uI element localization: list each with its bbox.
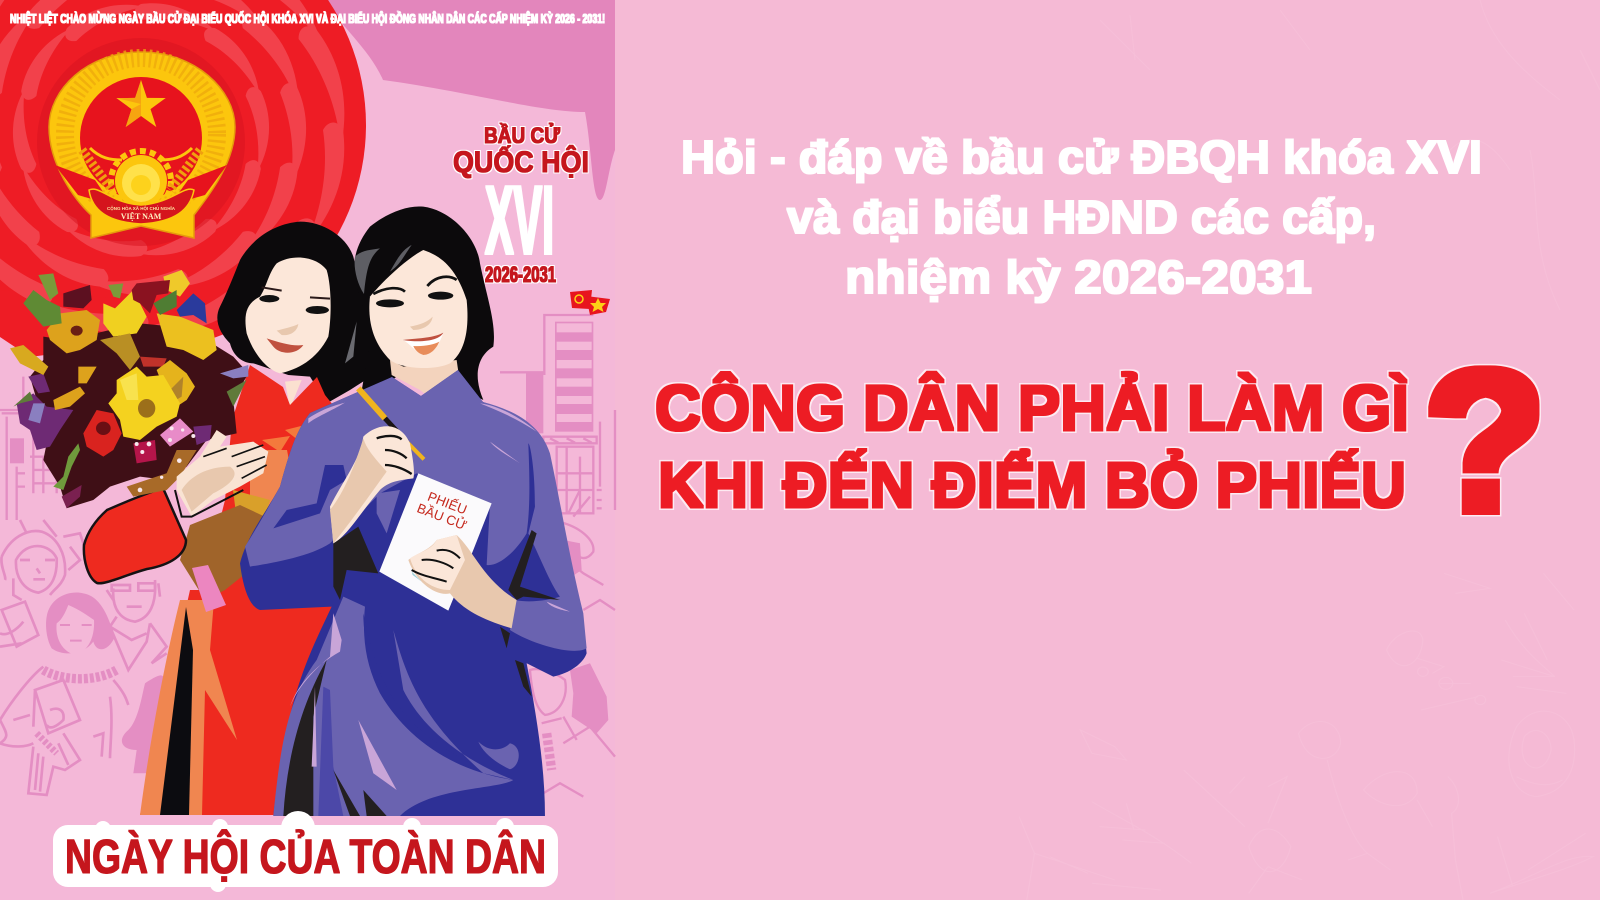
intro heading: hỏi đáp bbox=[681, 131, 1482, 303]
book top bbox=[0, 602, 38, 647]
background buildings, right bbox=[500, 315, 615, 797]
crowd line drawings, left bbox=[0, 520, 167, 795]
emblem ribbon: VIỆT NAM bbox=[121, 212, 162, 221]
right hand holding ballot bbox=[408, 535, 517, 628]
purple dress lower light areas bbox=[273, 597, 513, 816]
purple dress upper light areas bbox=[245, 370, 587, 651]
intro heading: hỏi đáp: nhiệm kỳ 2026-2031 bbox=[845, 251, 1312, 303]
ballot paper: PHIẾU bbox=[426, 489, 469, 517]
poster election title: BẦU CỬ bbox=[484, 123, 561, 148]
purple dress silhouette bbox=[240, 370, 587, 816]
main question heading bbox=[655, 371, 1409, 521]
banner: ngày hội của toàn dân bbox=[53, 811, 558, 892]
left hand holding pen bbox=[330, 426, 414, 543]
left woman hand on chest bbox=[175, 430, 268, 517]
main question heading: CÔNG DÂN PHẢI LÀM GÌ bbox=[655, 371, 1409, 444]
intro heading: hỏi đáp: và đại biểu HĐND các cấp, bbox=[787, 191, 1376, 243]
star bbox=[116, 80, 166, 127]
soldier outline bbox=[558, 522, 615, 610]
poster election title: 2026-2031 bbox=[485, 262, 556, 287]
right woman face bbox=[369, 250, 467, 395]
ethnic woman outline bbox=[530, 669, 615, 797]
red sleeve bbox=[84, 488, 186, 583]
man bbox=[107, 580, 160, 622]
intro heading: hỏi đáp: Hỏi - đáp về bầu cử ĐBQH khóa XVI bbox=[681, 131, 1482, 183]
poster top slogan: NHIỆT LIỆT CHÀO MỪNG NGÀY BẦU CỬ ĐẠI BIỂU QUỐC HỘI KHÓA XVI VÀ ĐẠI BIỂU HỘI ĐỒNG NHÂN DÂN CÁC CẤP NHIỆM KỲ 2026 - 2031! bbox=[10, 11, 605, 26]
emblem ribbon bbox=[89, 189, 194, 224]
left woman in red ao dai bbox=[84, 222, 392, 815]
icon: question mark: ? bbox=[1424, 330, 1546, 553]
national emblem bbox=[49, 52, 235, 238]
ballot paper: BẦU CỬ bbox=[415, 500, 469, 533]
top woman bbox=[1, 531, 65, 600]
right woman in purple ao dai bbox=[240, 206, 587, 816]
party and national flags bbox=[570, 290, 610, 315]
banner: ngày hội của toàn dân: NGÀY HỘI CỦA TOÀN DÂN bbox=[65, 829, 546, 884]
emblem ribbon: CỘNG HÒA XÃ HỘI CHỦ NGHĨA bbox=[107, 204, 176, 211]
poster: election illustration bbox=[0, 0, 615, 900]
bouquet of flowers bbox=[10, 270, 248, 508]
woman body bbox=[0, 667, 128, 758]
gear bbox=[111, 151, 171, 211]
red dress bodice bbox=[200, 365, 345, 600]
red dress skirt bbox=[140, 590, 345, 815]
pen bbox=[358, 388, 424, 459]
ballot paper bbox=[379, 473, 492, 611]
poster election title bbox=[453, 123, 589, 287]
dark pink paint drip bbox=[324, 0, 615, 200]
poster election title: QUỐC HỘI bbox=[453, 145, 589, 179]
top right person bits bbox=[20, 520, 87, 570]
left woman face bbox=[245, 258, 331, 373]
poster election title: XVI bbox=[485, 165, 554, 275]
background buildings, left bbox=[0, 377, 67, 520]
red swirl flower bbox=[0, 0, 374, 363]
main question heading: KHI ĐẾN ĐIỂM BỎ PHIẾU bbox=[658, 448, 1406, 521]
